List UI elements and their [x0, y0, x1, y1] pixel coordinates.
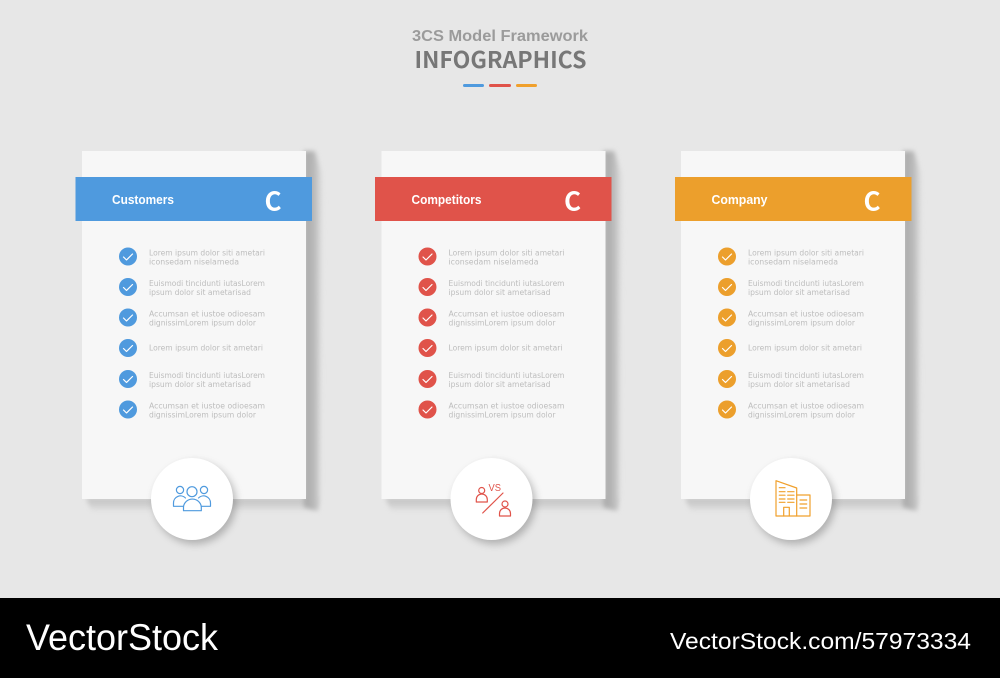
item 5: Euismodi tincidunti iutasLorem: [748, 371, 864, 380]
subtitle: 3CS Model Framework: 3CS Model Framework: [412, 28, 588, 45]
item 1: [418, 248, 564, 266]
header banner: C: [564, 182, 581, 218]
item 3: dignissimLorem ipsum dolor: [448, 318, 556, 328]
item 6: [418, 400, 564, 420]
icon badge: versus: [450, 458, 536, 544]
header banner: Competitors: [412, 193, 482, 207]
item 5: ipsum dolor sit ametarisad: [448, 380, 551, 389]
item 2: ipsum dolor sit ametarisad: [748, 288, 850, 297]
item 1: iconsedam niselameda: [448, 258, 538, 266]
footer url text: VectorStock.com/57973334: [670, 628, 971, 654]
item 3: [718, 308, 864, 328]
header banner: C: [864, 182, 881, 218]
item 6: [119, 400, 265, 420]
item 2: ipsum dolor sit ametarisad: [149, 288, 251, 297]
item 6: dignissimLorem ipsum dolor: [748, 410, 856, 420]
item 5: Euismodi tincidunti iutasLorem: [149, 371, 265, 380]
item 5: [718, 370, 864, 389]
header banner: C: [264, 182, 282, 218]
item 3: [418, 308, 564, 328]
card shadow: [86, 151, 323, 512]
item 6: dignissimLorem ipsum dolor: [149, 410, 257, 420]
item 5: [119, 370, 265, 389]
item 5: ipsum dolor sit ametarisad: [149, 380, 251, 389]
heading: INFOGRAPHICS: INFOGRAPHICS: [414, 41, 586, 75]
checklist: [418, 248, 564, 420]
item 3: dignissimLorem ipsum dolor: [149, 318, 257, 328]
item 6: Accumsan et iustoe odioesam: [448, 402, 564, 410]
title colour dashes: [463, 84, 537, 87]
checklist: [119, 248, 265, 420]
card body: [82, 151, 306, 499]
item 4: Lorem ipsum dolor sit ametari: [748, 344, 862, 352]
item 1: Lorem ipsum dolor siti ametari: [149, 248, 265, 258]
item 2: Euismodi tincidunti iutasLorem: [748, 279, 864, 288]
icon badge: building: [750, 458, 835, 544]
item 6: [718, 400, 864, 420]
item 1: iconsedam niselameda: [149, 258, 239, 266]
item 1: iconsedam niselameda: [748, 258, 838, 266]
header banner: [375, 177, 612, 221]
item 3: Accumsan et iustoe odioesam: [748, 310, 864, 318]
item 2: [418, 278, 564, 297]
card shadow: [386, 151, 622, 512]
item 2: [718, 278, 864, 297]
item 2: Euismodi tincidunti iutasLorem: [149, 279, 265, 288]
item 4: [718, 339, 862, 357]
item 6: Accumsan et iustoe odioesam: [748, 402, 864, 410]
card body: [681, 151, 905, 499]
header banner: Customers: [112, 193, 174, 207]
item 1: [119, 248, 265, 266]
item 1: Lorem ipsum dolor siti ametari: [748, 248, 864, 258]
footer band: [0, 598, 1000, 678]
panel: customers: [76, 151, 323, 544]
item 4: [418, 339, 562, 357]
item 6: dignissimLorem ipsum dolor: [448, 410, 556, 420]
footer logo text: VectorStock: [26, 617, 218, 658]
panel: competitors: [375, 151, 622, 544]
header banner: [675, 177, 912, 221]
item 2: [119, 278, 265, 297]
item 5: ipsum dolor sit ametarisad: [748, 380, 850, 389]
item 3: Accumsan et iustoe odioesam: [149, 310, 265, 318]
item 2: Euismodi tincidunti iutasLorem: [448, 279, 564, 288]
item 2: ipsum dolor sit ametarisad: [448, 288, 551, 297]
icon badge: people: [151, 458, 236, 544]
item 3: [119, 308, 265, 328]
item 4: Lorem ipsum dolor sit ametari: [149, 344, 263, 352]
item 1: Lorem ipsum dolor siti ametari: [448, 248, 564, 258]
item 3: dignissimLorem ipsum dolor: [748, 318, 856, 328]
title: [412, 28, 588, 75]
panel: company: [675, 151, 922, 544]
card shadow: [685, 151, 922, 512]
item 6: Accumsan et iustoe odioesam: [149, 402, 265, 410]
item 3: Accumsan et iustoe odioesam: [448, 310, 564, 318]
header banner: [76, 177, 312, 221]
item 1: [718, 248, 864, 266]
header banner: Company: [712, 193, 768, 207]
icon: person vs person: VS: [488, 483, 501, 494]
item 5: [418, 370, 564, 389]
item 4: Lorem ipsum dolor sit ametari: [448, 344, 562, 352]
item 5: Euismodi tincidunti iutasLorem: [448, 371, 564, 380]
icon: office building: [776, 481, 810, 516]
item 4: [119, 339, 263, 357]
icon: group of people: [173, 486, 211, 511]
checklist: [718, 248, 864, 420]
card body: [382, 151, 606, 499]
